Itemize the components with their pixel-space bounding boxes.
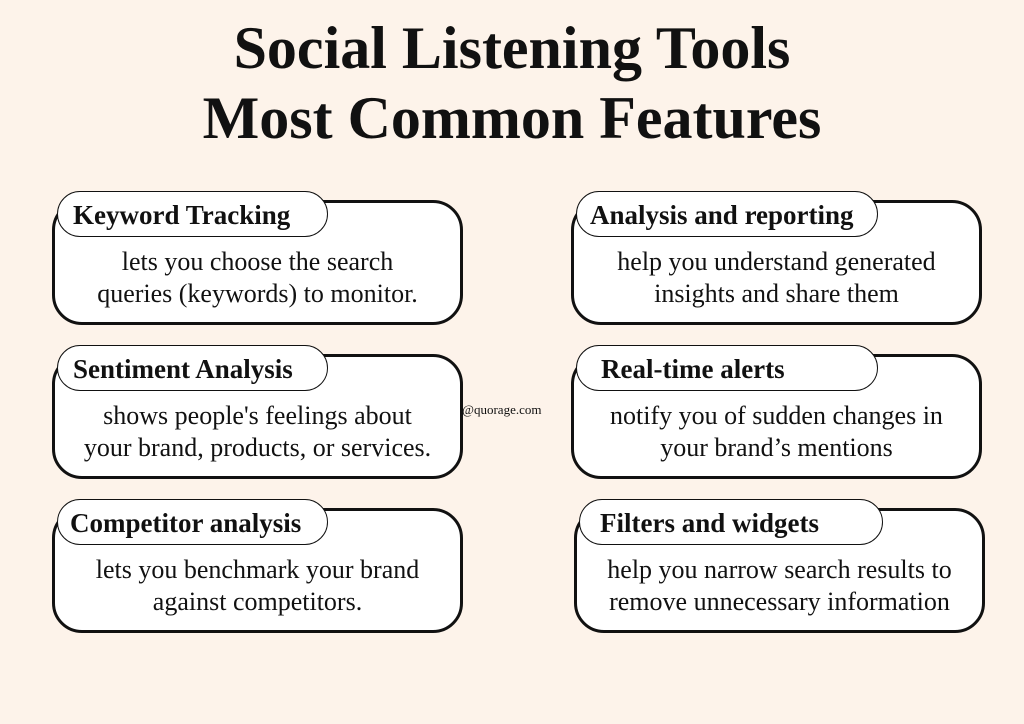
panel: competitor analysis: lets you benchmark your brand (96, 555, 419, 584)
watermark: @quorage.com (462, 402, 541, 417)
panel: analysis and reporting: help you understand generated (617, 247, 936, 276)
panel: competitor analysis: Competitor analysis (70, 508, 301, 538)
title (203, 15, 821, 151)
panel: analysis and reporting: insights and share them (654, 279, 899, 308)
panel: analysis and reporting (571, 191, 982, 325)
panel: real-time alerts: your brand’s mentions (660, 433, 893, 462)
panel: filters and widgets (574, 499, 985, 633)
panel: analysis and reporting: Analysis and reporting (590, 200, 854, 230)
panel: keyword tracking (52, 191, 463, 325)
panel: filters and widgets: help you narrow search results to (607, 555, 952, 584)
panel: real-time alerts: Real-time alerts (601, 354, 785, 384)
panel: keyword tracking: lets you choose the search (122, 247, 393, 276)
panel: keyword tracking: queries (keywords) to monitor. (97, 279, 418, 308)
panel: sentiment analysis: Sentiment Analysis (73, 354, 293, 384)
panel: filters and widgets: remove unnecessary information (609, 587, 950, 616)
panel: real-time alerts: notify you of sudden changes in (610, 401, 943, 430)
title: Most Common Features (203, 85, 821, 151)
panel: sentiment analysis: your brand, products, or services. (84, 433, 431, 462)
title: Social Listening Tools (234, 15, 790, 81)
panel: competitor analysis (52, 499, 463, 633)
panel: competitor analysis: against competitors. (153, 587, 362, 616)
panel: keyword tracking: Keyword Tracking (73, 200, 290, 230)
panel: sentiment analysis (52, 345, 463, 479)
panel: real-time alerts (571, 345, 982, 479)
panel: sentiment analysis: shows people's feelings about (103, 401, 412, 430)
panel: filters and widgets: Filters and widgets (600, 508, 819, 538)
